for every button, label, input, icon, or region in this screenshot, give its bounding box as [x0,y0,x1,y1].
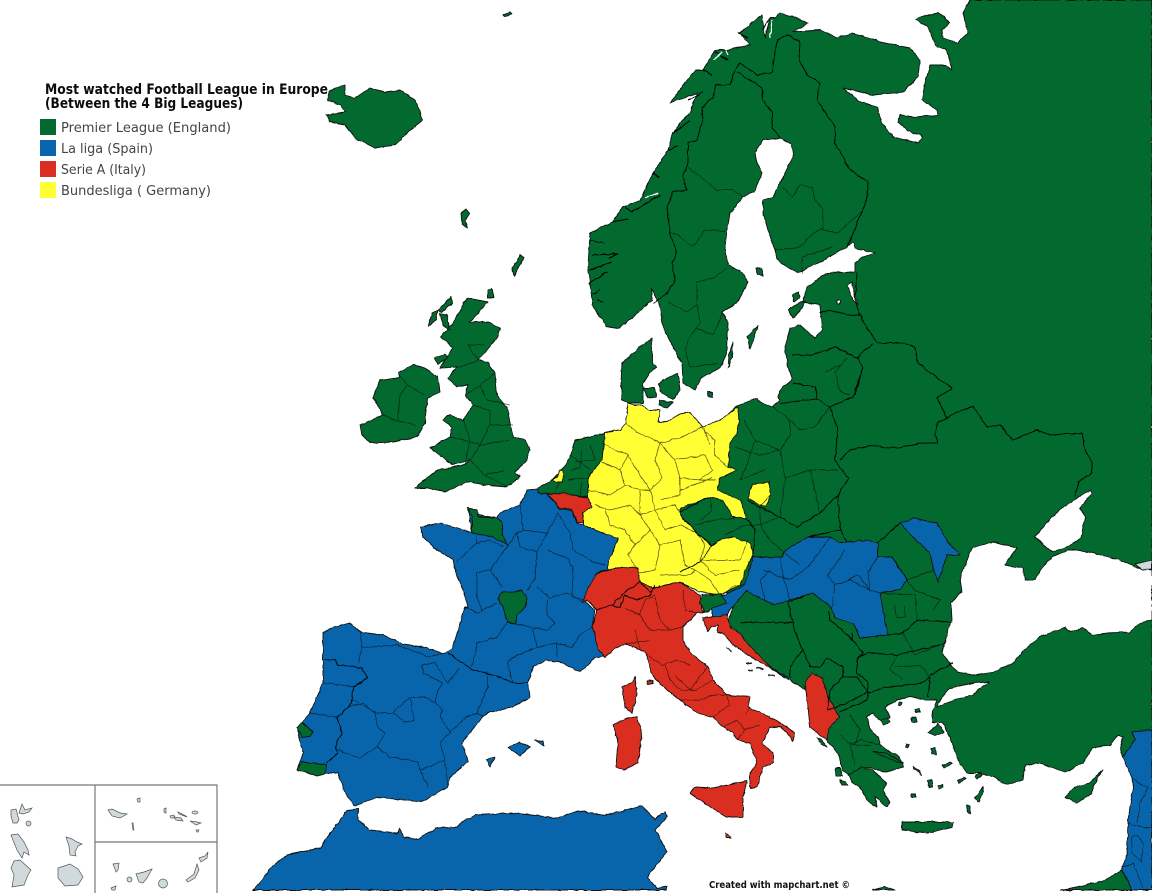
region: Moldova blue [900,518,960,582]
borders: Ukraine and Romania north [808,495,900,543]
borders: Netherlands Belgium [555,445,595,495]
region: La Liga France, Spain, Portugal [297,489,618,806]
inset: Azores and Madeira [108,798,201,832]
region: Karpathos green [967,805,970,814]
region: Rhodes green [975,787,984,802]
region: Outer Hebrides south green [428,310,438,327]
region: Corsica red [622,677,637,713]
region: Albania red [805,673,839,740]
region: North Africa blue [253,806,667,890]
region: Andros green [913,766,922,775]
region: Ibiza blue [487,757,495,767]
region: Skyros green [905,744,909,748]
region: Saaremaa green [788,302,805,318]
region: Gotland green [747,325,758,349]
borders: Scandinavia [653,70,735,303]
region: Africa coast fragment [872,887,895,890]
region: Bornholm green [707,392,713,397]
region: Netherlands and Flanders green [538,433,605,497]
region: Premier League countries mainland (Scandinavia, Eastern Europe, Balkans, Turkey, Russia) [588,0,1152,785]
region: Italy and Switzerland red [582,567,795,788]
legend: La liga: La liga (Spain) [61,141,153,157]
legend [40,119,231,199]
region: Oland green [728,342,733,368]
inset: Caribbean and Indian Ocean islands [11,804,83,887]
region: Naxos green [928,780,933,787]
region: Brussels yellow [552,470,564,482]
region: Kos green [957,777,966,784]
sea: Lake Peipus [847,282,858,305]
region: Mallorca blue [508,742,530,756]
Dalmatian islands [726,647,775,676]
region: Corfu green [817,738,827,747]
region: Aland green [756,268,763,276]
borders: Poland south and Czech [680,495,838,555]
region: Algarve green [297,762,327,776]
region: Bundesliga countries (Germany, Austria, Pomerania, Silesia) [583,403,753,595]
borders: Ireland and Great Britain [383,345,513,487]
region: Lesbos green [928,724,944,736]
region: Iceland green [326,85,423,148]
inset maps [0,785,217,893]
region: Peloponnese green [848,767,890,807]
region: Outer Hebrides north green [438,297,452,312]
title line 2: (Between the 4 Big Leagues) [45,96,243,112]
region: Polish yellow block [748,482,771,507]
region: Sardinia red [613,717,642,770]
legend: Bundesliga: Bundesliga ( Germany) [61,183,211,199]
region: Thasos green [881,718,890,725]
borders: Middle East [1123,778,1152,888]
region: Skye green [440,313,450,330]
region: Chios green [931,748,936,755]
region: Faroe Islands green [461,209,470,228]
region: Shetland green [512,255,524,276]
borders: Germany states [589,423,748,595]
borders: Spain Portugal [325,653,528,763]
Norwegian fjords [589,18,770,302]
fjord openings [645,20,772,198]
region: Lefkada green [835,768,842,776]
region: Euboea green [873,752,903,763]
region: Lemnos green [911,717,917,722]
region: Croatia coast red [703,615,788,678]
legend: Serie A: Serie A (Italy) [61,162,146,178]
region: Gokceada green [898,702,902,706]
sea: Black Sea [942,542,1152,675]
region: Middle East blue [1122,730,1152,890]
region: Milos green [911,794,916,797]
region: Cyclades green [938,784,943,789]
region: Kefalonia green [840,780,848,785]
region: Limousin green [498,591,527,624]
map of Europe [253,0,1152,890]
region: Arctic island green [503,12,512,17]
inset frame lines [0,785,217,893]
region: Normandy green [468,508,508,545]
region: Georgia grey [1135,560,1152,570]
borders: Baltics and Belarus [780,273,877,495]
region: Hiiumaa green [792,292,800,302]
title line 1: Most watched Football League in Europe [45,82,328,98]
borders: Switzerland Italy [597,582,660,610]
legend: Premier League: Premier League (England) [61,120,231,136]
borders: France [457,505,605,683]
region: Great Britain green [415,298,530,492]
region: Orkney green [488,289,494,298]
region: Crete green [902,822,953,833]
region: Wallonia red [548,493,592,523]
region: Funen green [643,388,657,398]
sea: Sea of Azov [1035,490,1092,552]
region: Samos green [942,762,952,768]
region: Islay green [434,354,448,364]
region: Dodecanese green [975,773,982,779]
title [45,82,328,112]
country regions [253,0,1152,890]
country and region borders [310,18,1152,888]
region: Slovenia green [700,594,727,612]
region: Samothrace green [915,708,920,712]
credit: Created with mapchart.net © [709,880,850,891]
region: Malta red [725,833,731,838]
region: Zealand green [658,373,680,400]
region: Cyprus green [1065,770,1102,803]
region: Elba red [647,680,653,684]
region: Sicily red [690,781,747,817]
region: Central Europe blue (East Austria, Hungary, Slovakia, West Romania) [712,537,907,638]
region: Ireland green [360,365,440,443]
borders: Balkans [740,594,953,712]
sea: Sea of Marmara [937,682,990,707]
region: Egypt Sinai green [1060,870,1132,890]
sea: small lake in Latvia [837,300,840,304]
region: Lolland green [659,400,673,408]
inset: Canary Islands [111,852,208,890]
region: Menorca blue [535,740,544,746]
region: Lisbon green [297,722,313,737]
borders: Austria Hungary Slovakia [720,537,880,608]
region: Jutland green [621,338,657,403]
